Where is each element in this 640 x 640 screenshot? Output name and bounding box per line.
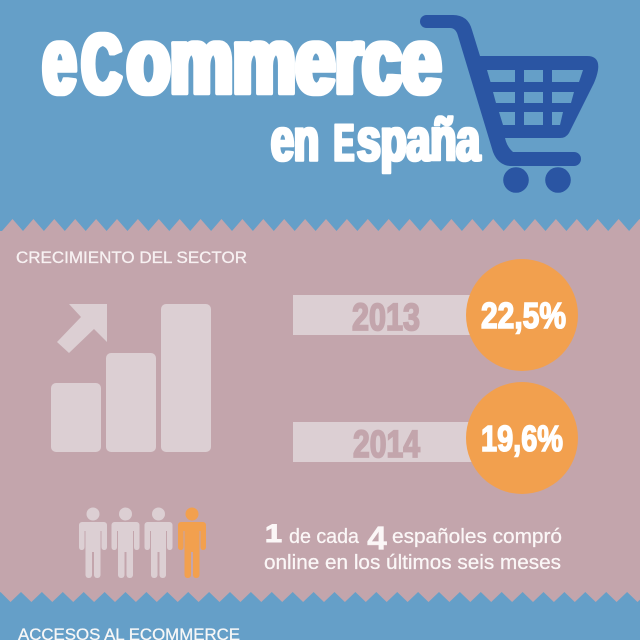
big number 4: 4: [367, 520, 388, 556]
year 2013: 2013: [352, 297, 420, 339]
bar medium: [106, 353, 156, 452]
row: 2013: [293, 259, 578, 371]
text second line: online en los últimos seis meses: [264, 552, 561, 574]
icon: cart wheel right: [545, 167, 571, 193]
circle 2014: [466, 382, 578, 494]
text de cada: de cada: [289, 526, 360, 548]
row: 2014: [293, 382, 578, 494]
bar small: [51, 383, 101, 452]
subtitle: en España: [271, 106, 480, 174]
text block: 1 de cada 4 españoles compró online: [264, 520, 562, 574]
person 2: [112, 508, 140, 578]
bar chart icon with arrow: [51, 304, 211, 452]
year 2014: 2014: [353, 424, 420, 466]
icon: cart wheel left: [503, 167, 529, 193]
person 3: [144, 508, 172, 578]
title: eCommerce: ommerce: [127, 8, 441, 113]
value 19,6%: 19,6%: [481, 418, 563, 459]
title: eCommerce: C: [82, 17, 121, 111]
subtitle: en España: spaña: [357, 106, 480, 174]
person 1: [79, 508, 107, 578]
year bar 2014: [293, 422, 483, 462]
title: eCommerce: [43, 8, 441, 113]
big number 1: 1: [265, 520, 282, 548]
panel: accesos al ecommerce background: [0, 592, 640, 640]
panel: crecimiento del sector background: [0, 219, 640, 602]
subtitle: en España: E: [334, 114, 354, 172]
icon: shopping cart: [420, 15, 598, 193]
person 4 highlighted: [178, 508, 206, 578]
circle 2013: [466, 259, 578, 371]
people icons: 1 of 4: [79, 508, 206, 578]
heading: crecimiento del sector: CRECIMIENTO DEL SECTOR: [16, 248, 247, 267]
bar tall: [161, 304, 211, 452]
title: eCommerce: e: [43, 8, 76, 113]
panel: header background: [0, 0, 640, 231]
value 22,5%: 22,5%: [481, 295, 566, 336]
arrow up-right: [57, 304, 107, 353]
text españoles compró: españoles compró: [392, 526, 562, 548]
year bar 2013: [293, 295, 483, 335]
subtitle: en España: en: [271, 106, 319, 174]
